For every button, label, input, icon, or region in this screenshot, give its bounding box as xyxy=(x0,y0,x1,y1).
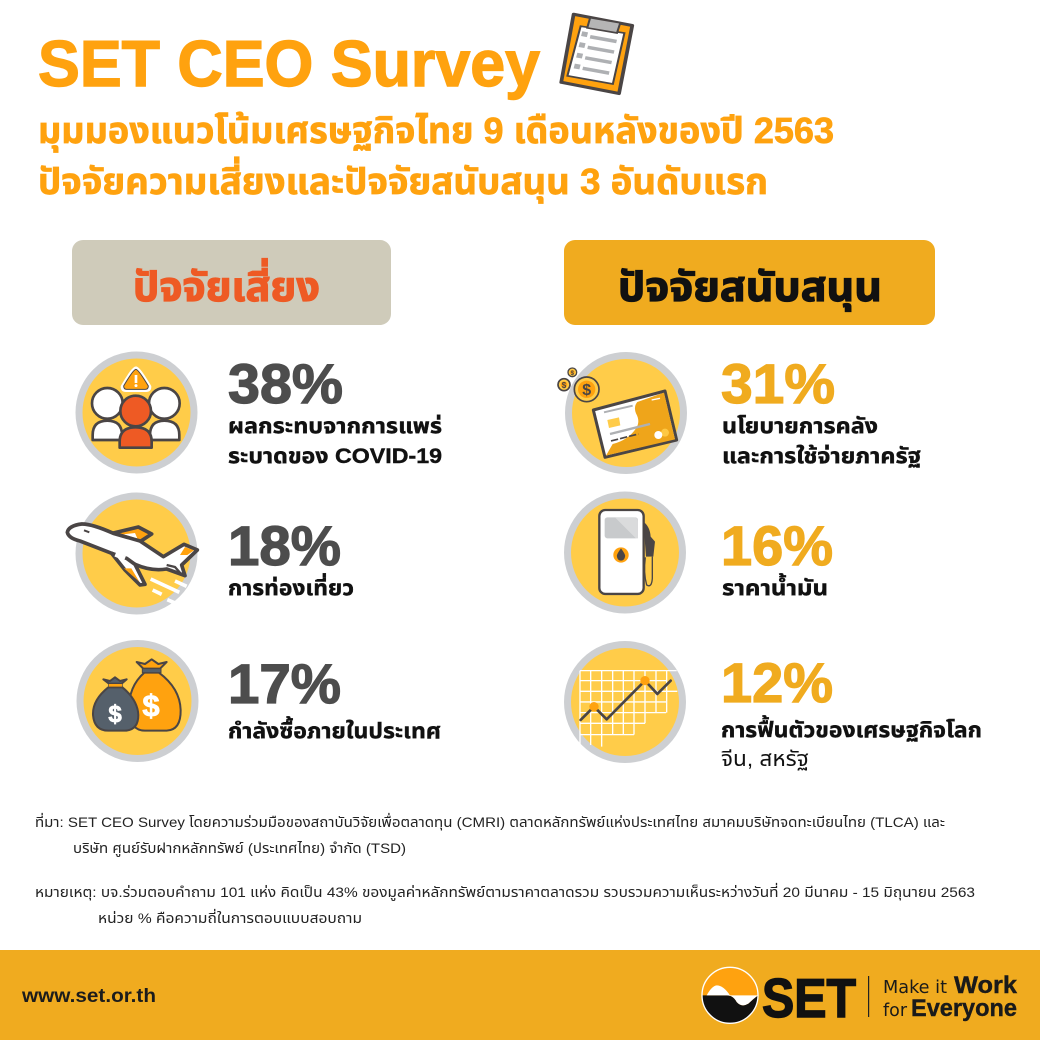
stat: 31% xyxy=(721,352,921,468)
icon: credit card and coins: $ xyxy=(582,382,591,399)
stat: 17%: กำลังซื้อภายในประเทศ xyxy=(228,716,441,743)
source note: บริษัท ศูนย์รับฝากหลักทรัพย์ (ประเทศไทย) จำกัด (TSD) xyxy=(73,840,406,857)
icon: money bags: $ xyxy=(108,701,122,728)
slogan: Everyone xyxy=(911,995,1017,1022)
stat: 12%: จีน, สหรัฐ xyxy=(721,748,809,771)
website: www.set.or.th xyxy=(21,986,156,1007)
slogan: Work xyxy=(954,972,1018,999)
remark note: หน่วย % คือความถี่ในการตอบแบบสอบถาม xyxy=(98,908,362,926)
slogan: for xyxy=(883,1000,908,1021)
icon: airplane xyxy=(67,496,197,611)
source note xyxy=(35,812,945,857)
icon: money bags xyxy=(80,644,195,758)
stat: 17% xyxy=(228,652,441,743)
stat: 16%: 16% xyxy=(721,514,833,577)
stat: 18% xyxy=(228,514,354,600)
remark note xyxy=(35,882,975,926)
stat: 16%: ราคาน้ำมัน xyxy=(722,573,828,600)
icon: credit card and coins xyxy=(558,356,684,470)
icon: credit card and coins: $ xyxy=(562,381,567,390)
slogan: Make it xyxy=(883,977,947,998)
stat: 12%: การฟื้นตัวของเศรษฐกิจโลก xyxy=(721,715,982,742)
footer band xyxy=(0,950,1040,1040)
icon: clipboard xyxy=(561,14,632,94)
stat: 31%: นโยบายการคลัง xyxy=(722,415,878,438)
icon: people with warning xyxy=(79,355,194,470)
panel: support heading: ปัจจัยสนับสนุน xyxy=(618,264,882,312)
stat: 18%: 18% xyxy=(228,514,341,577)
icon: credit card and coins: $ xyxy=(571,371,575,377)
icon: money bags: $ xyxy=(142,688,160,723)
stat: 31%: 31% xyxy=(721,352,835,415)
stat: 38% xyxy=(228,352,442,468)
stat: 38%: 38% xyxy=(228,352,343,415)
stat: 17%: 17% xyxy=(228,652,341,715)
stat: 18%: การท่องเที่ยว xyxy=(228,573,354,600)
title: SET CEO Survey xyxy=(38,27,540,100)
slogan xyxy=(883,972,1018,1022)
stat: 38%: ระบาดของ COVID-19 xyxy=(228,445,442,468)
panel: support heading xyxy=(564,240,935,325)
subtitle line 1: มุมมองแนวโน้มเศรษฐกิจไทย 9 เดือนหลังของปี 2563 xyxy=(38,110,834,152)
remark note: หมายเหตุ: บจ.ร่วมตอบคำถาม 101 แห่ง คิดเป็น 43% ของมูลค่าหลักทรัพย์ตามราคาตลาดรวม รวบรวมความเห็นระหว่างวันที่ 20 มีนาคม - 15 มิถุนายน 2563 xyxy=(35,882,975,901)
stat: 12%: 12% xyxy=(721,651,833,714)
SET logo xyxy=(702,967,856,1029)
stat: 31%: และการใช้จ่ายภาครัฐ xyxy=(722,445,921,468)
source note: ที่มา: SET CEO Survey โดยความร่วมมือของสถาบันวิจัยเพื่อตลาดทุน (CMRI) ตลาดหลักทรัพย์แห่งประเทศไทย สมาคมบริษัทจดทะเบียนไทย (TLCA) และ xyxy=(35,812,945,831)
stat: 38%: ผลกระทบจากการแพร่ xyxy=(228,415,442,438)
panel: risk heading: ปัจจัยเสี่ยง xyxy=(133,258,320,310)
icon: growth chart xyxy=(568,644,682,760)
stat: 12% xyxy=(721,651,982,771)
SET logo: SET xyxy=(762,967,856,1029)
panel: risk heading xyxy=(72,240,391,325)
subtitle line 2: ปัจจัยความเสี่ยงและปัจจัยสนับสนุน 3 อันดับแรก xyxy=(38,156,768,203)
icon: fuel pump xyxy=(568,495,682,610)
divider xyxy=(868,976,869,1017)
